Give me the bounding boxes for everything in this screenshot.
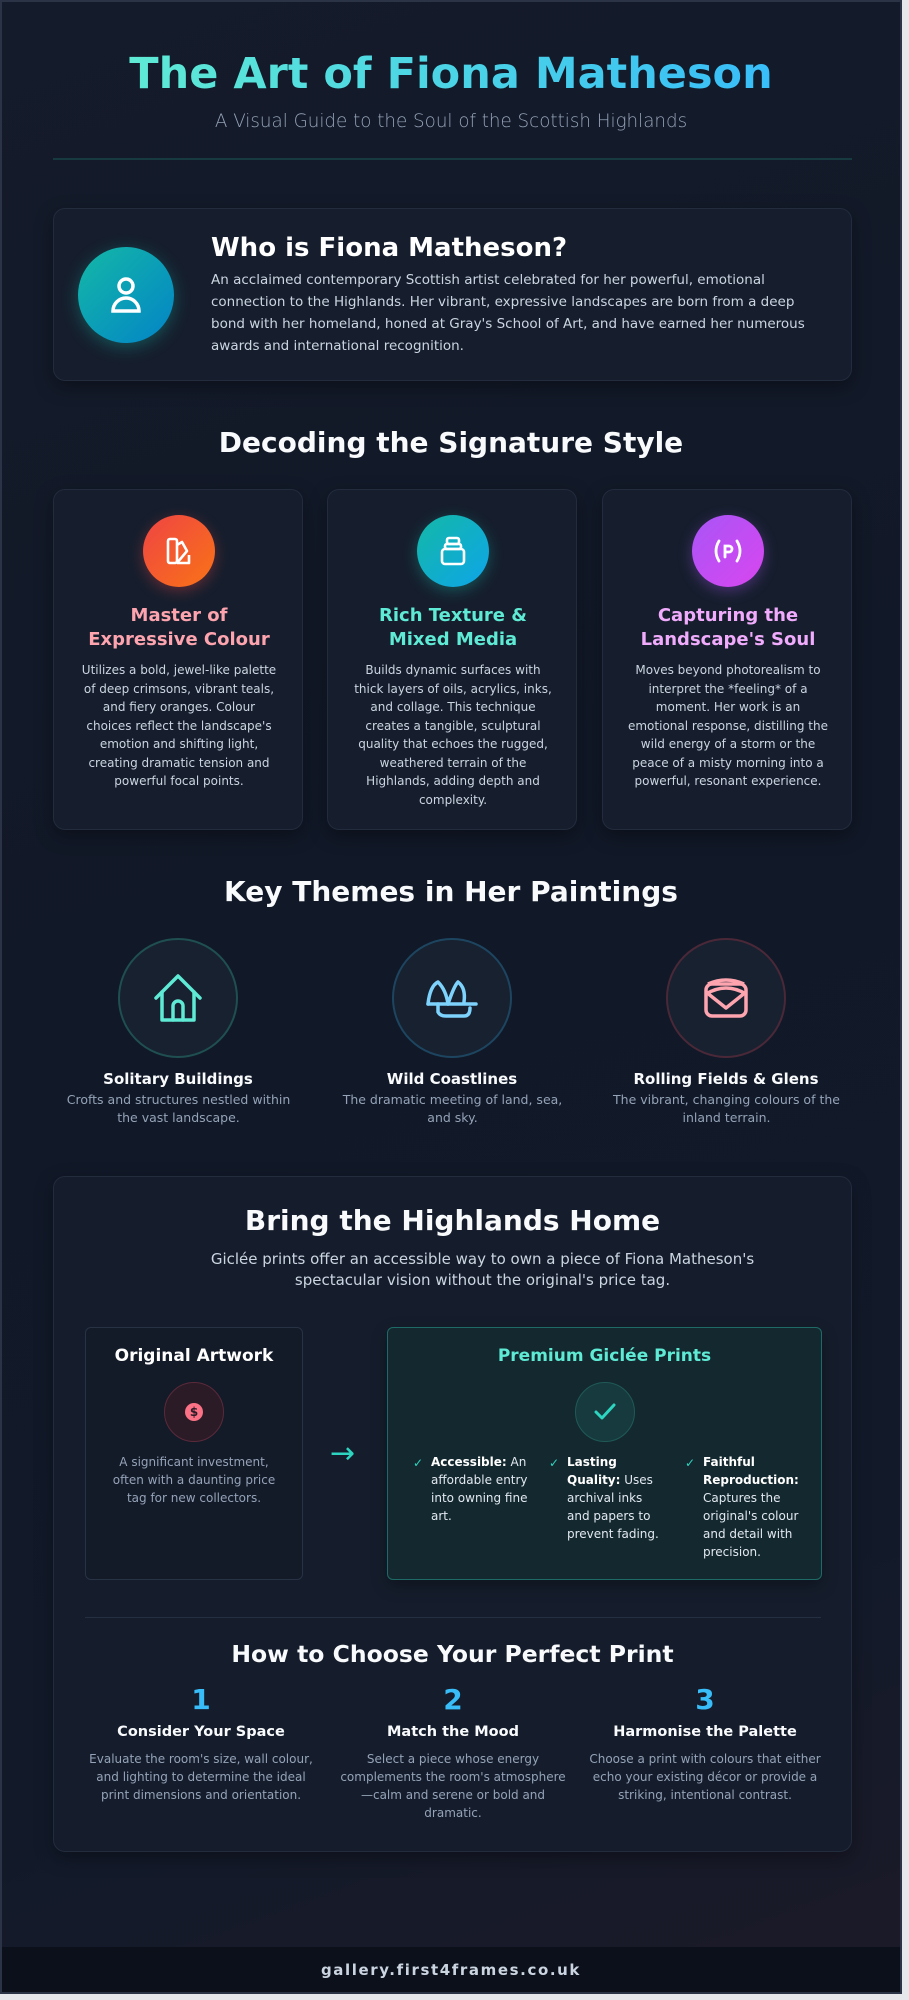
intro text — [211, 1250, 754, 1289]
title: Rich Texture & — [379, 605, 527, 626]
step 3: Harmonise the Palette — [613, 1724, 797, 1740]
panel: colour — [53, 489, 303, 830]
icon: price — [164, 1382, 224, 1442]
heading: signature style: Decoding the Signature Style — [219, 426, 683, 459]
theme: fields: The vibrant, changing colours of the inland terrain. — [613, 1092, 840, 1125]
subtitle: A Visual Guide to the Soul of the Scottish Highlands — [215, 111, 687, 132]
icon: wave — [392, 938, 512, 1058]
intro text: Giclée prints offer an accessible way to own a piece of Fiona Matheson's — [211, 1250, 754, 1268]
icon: person — [78, 247, 174, 343]
title: Mixed Media — [389, 629, 517, 650]
heading: who is: Who is Fiona Matheson? — [211, 233, 567, 263]
step 2 — [340, 1683, 566, 1820]
theme: buildings: Crofts and structures nestled within the vast landscape. — [67, 1092, 290, 1125]
arrow: → — [330, 1436, 355, 1471]
icon: price: $ — [190, 1405, 198, 1419]
benefit list: Lasting Quality: Uses archival inks and papers to prevent fading. — [567, 1455, 659, 1541]
step 3 — [589, 1683, 821, 1802]
bio text: An acclaimed contemporary Scottish artist celebrated for her powerful, emotional — [211, 272, 765, 288]
step 1 — [89, 1683, 313, 1802]
text: Builds dynamic surfaces with thick layers of oils, acrylics, inks, and collage. This technique creates a tangible, sculptural quality that echoes the rugged, weathered terrain of the Highlands, adding depth and complexity. — [354, 663, 552, 806]
title: Landscape's Soul — [641, 629, 815, 650]
text: Moves beyond photorealism to interpret the *feeling* of a moment. Her work is an emotional response, distilling the wild energy of a storm or the peace of a misty morning into a powerful, resonant experience. — [628, 663, 828, 788]
theme: buildings — [67, 938, 290, 1125]
heading: Bring the Highlands Home — [245, 1204, 660, 1237]
bio text: awards and international recognition. — [211, 338, 464, 354]
benefit list: Faithful Reproduction: Captures the original's colour and detail with precision. — [703, 1455, 799, 1559]
title — [379, 605, 527, 650]
bio text: connection to the Highlands. Her vibrant, expressive landscapes are born from a deep — [211, 294, 794, 310]
intro text: spectacular vision without the original's price tag. — [295, 1271, 670, 1289]
icon: check — [575, 1382, 635, 1442]
title: Master of — [131, 605, 227, 626]
text: Utilizes a bold, jewel-like palette of deep crimsons, vibrant teals, and fiery oranges. Colour choices reflect the landscape's emotion and shifting light, creating dramatic tension and powerful focal points. — [82, 663, 276, 788]
theme: coastlines: Wild Coastlines — [387, 1070, 517, 1088]
theme: fields: Rolling Fields & Glens — [633, 1070, 819, 1088]
bio text — [211, 272, 805, 354]
panel: bring highlands home — [53, 1176, 852, 1852]
benefit list: Accessible: An affordable entry into owning fine art. — [431, 1455, 528, 1523]
icon: palette — [143, 515, 215, 587]
benefit list: ✓ — [413, 1456, 423, 1470]
theme: fields — [612, 938, 840, 1125]
theme: buildings: Solitary Buildings — [103, 1070, 253, 1088]
benefit list: ✓ — [685, 1456, 695, 1470]
step 1: Consider Your Space — [117, 1724, 285, 1740]
icon: jar — [417, 515, 489, 587]
box: original artwork: Original Artwork — [115, 1346, 273, 1366]
heading: choose print: How to Choose Your Perfect Print — [231, 1640, 674, 1668]
heading: key themes: Key Themes in Her Paintings — [224, 875, 678, 908]
bio text: bond with her homeland, honed at Gray's School of Art, and have earned her numerous — [211, 316, 805, 332]
title — [88, 605, 270, 650]
step 1: Evaluate the room's size, wall colour, and lighting to determine the ideal print dimensions and orientation. — [89, 1752, 313, 1802]
title: Capturing the — [658, 605, 798, 626]
icon: fields — [666, 938, 786, 1058]
title — [641, 605, 815, 650]
step 2: 2 — [443, 1683, 463, 1716]
box: original artwork — [85, 1327, 303, 1580]
benefit list — [413, 1455, 799, 1559]
icon: broadcast — [692, 515, 764, 587]
footer: gallery.first4frames.co.uk — [321, 1961, 581, 1979]
panel: texture — [327, 489, 577, 830]
icon: house — [118, 938, 238, 1058]
theme: coastlines — [342, 938, 562, 1125]
theme: coastlines: The dramatic meeting of land, sea, and sky. — [343, 1092, 562, 1125]
panel: who is Fiona — [53, 208, 852, 381]
benefit list: ✓ — [549, 1456, 559, 1470]
title: The Art of Fiona Matheson — [129, 49, 773, 99]
step 3: 3 — [695, 1683, 715, 1716]
box: original artwork: A significant investment, often with a daunting price tag for new collectors. — [113, 1455, 275, 1505]
step 2: Select a piece whose energy complements the room's atmosphere —calm and serene or bold and dramatic. — [340, 1752, 566, 1820]
step 1: 1 — [191, 1683, 211, 1716]
footer — [2, 1947, 900, 1994]
title: Expressive Colour — [88, 629, 270, 650]
panel: soul — [602, 489, 852, 830]
box: premium prints: Premium Giclée Prints — [498, 1346, 711, 1366]
step 3: Choose a print with colours that either echo your existing décor or provide a striking, intentional contrast. — [589, 1752, 821, 1802]
box: premium prints — [387, 1327, 822, 1580]
step 2: Match the Mood — [387, 1724, 519, 1740]
